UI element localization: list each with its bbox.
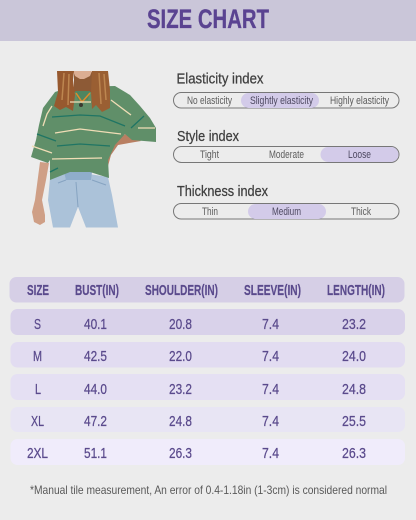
sweater [31, 86, 156, 180]
table header row: SLEEVE(IN) [244, 283, 301, 299]
row L: L [35, 381, 41, 398]
row S: 23.2 [342, 316, 366, 333]
right arm [102, 133, 141, 166]
scale: elasticity: No elasticity [187, 95, 232, 107]
row L: 24.8 [342, 381, 366, 398]
left arm [32, 162, 49, 225]
row 2XL: 26.3 [169, 445, 192, 462]
row M: M [33, 348, 42, 365]
table header row: SHOULDER(IN) [145, 283, 218, 299]
panel: style index [174, 129, 399, 162]
scale: thickness: Medium [272, 206, 301, 218]
row M: 22.0 [169, 348, 192, 365]
title banner [0, 0, 416, 41]
row XL: XL [31, 413, 44, 430]
teal stripes [37, 115, 144, 172]
row XL: 47.2 [84, 413, 107, 430]
scale: thickness [174, 204, 399, 219]
heading: elasticity: Elasticity index [176, 72, 264, 88]
row 2XL [10, 439, 405, 465]
neck and hair [74, 72, 92, 92]
table header row: LENGTH(IN) [327, 283, 385, 299]
scale: style: Tight [200, 149, 219, 161]
row S: 7.4 [262, 316, 279, 333]
row S: S [34, 316, 41, 333]
jeans [48, 171, 118, 228]
scale: style: Moderate [269, 149, 304, 161]
row L [10, 374, 405, 400]
row S [10, 309, 405, 335]
title: SIZE CHART [147, 4, 269, 34]
row M: 24.0 [342, 348, 366, 365]
scale: elasticity: Highly elasticity [330, 95, 389, 107]
row M [10, 342, 405, 368]
product photo: woman in striped sweater [31, 71, 156, 228]
row M: 7.4 [262, 348, 279, 365]
size table [10, 277, 405, 465]
row XL [10, 407, 405, 432]
table header row [10, 277, 404, 302]
row L: 23.2 [169, 381, 192, 398]
row S: 40.1 [84, 316, 107, 333]
cream stripes [32, 100, 155, 159]
row L: 7.4 [262, 381, 279, 398]
row XL: 24.8 [169, 413, 192, 430]
table header row: BUST(IN) [75, 283, 119, 299]
row S: 20.8 [169, 316, 192, 333]
row L: 44.0 [84, 381, 107, 398]
scale: elasticity [174, 92, 399, 108]
table header row: SIZE [27, 283, 49, 299]
row 2XL: 7.4 [262, 445, 279, 462]
scale: style [174, 146, 399, 162]
heading: thickness: Thickness index [177, 184, 269, 200]
row 2XL: 51.1 [84, 445, 107, 462]
row XL: 25.5 [342, 413, 366, 430]
scale: thickness: Thin [202, 206, 218, 218]
scale: thickness: Thick [351, 206, 371, 218]
panel: elasticity index [174, 72, 399, 108]
row XL: 7.4 [262, 413, 279, 430]
scale: elasticity: Slightly elasticity [250, 95, 313, 107]
row 2XL: 2XL [27, 445, 48, 462]
row M: 42.5 [84, 348, 107, 365]
panel: thickness index [174, 184, 399, 219]
scale: style: Loose [348, 149, 371, 161]
row 2XL: 26.3 [342, 445, 366, 462]
heading: style: Style index [177, 129, 240, 145]
